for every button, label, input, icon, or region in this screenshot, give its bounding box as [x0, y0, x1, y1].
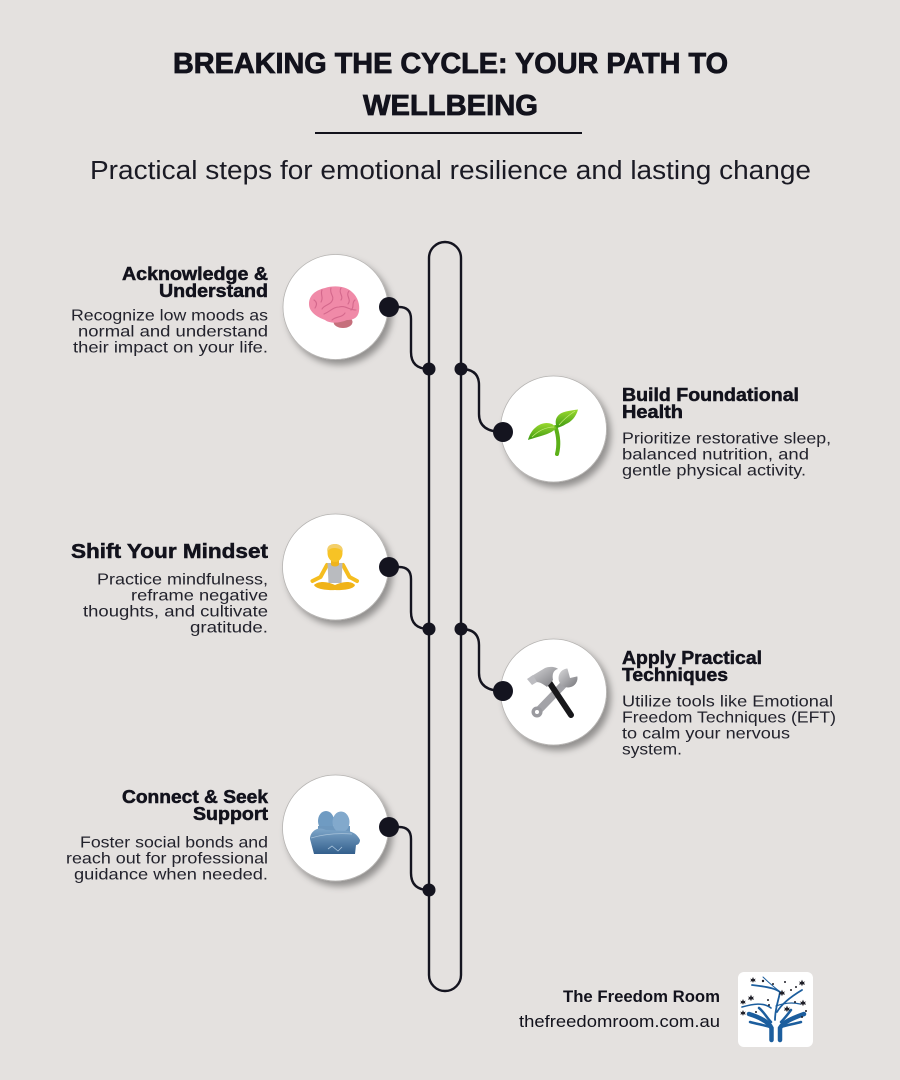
icon: person meditating — [312, 544, 357, 590]
step 4 heading: Apply Practical — [622, 648, 762, 668]
step 1 text — [71, 308, 268, 356]
step 5 text: reach out for professional — [66, 850, 268, 868]
footer brand: The Freedom Room — [563, 988, 720, 1006]
icon: sprout — [528, 410, 578, 454]
big dot — [493, 681, 513, 701]
icon: people hugging — [310, 811, 360, 854]
step 5 circle — [282, 775, 388, 881]
step 3 text: reframe negative — [131, 588, 268, 604]
step 1 heading: Understand — [159, 281, 268, 301]
step 4 text: to calm your nervous — [622, 726, 790, 742]
step 5 heading: Connect & Seek — [122, 787, 269, 807]
step 1: acknowledge and understand — [71, 254, 436, 376]
title: WELLBEING — [363, 90, 538, 122]
step 4 heading — [622, 648, 762, 685]
step 4 text — [622, 694, 836, 758]
step 2 text: balanced nutrition, and — [622, 446, 809, 464]
step 1 heading — [122, 264, 268, 301]
connectors — [389, 307, 503, 890]
step 3 text: Practice mindfulness, — [97, 572, 268, 588]
step 1 text: normal and understand — [78, 324, 268, 340]
step 3 text: thoughts, and cultivate — [83, 604, 268, 620]
junction dot — [422, 622, 436, 636]
step 5 text — [66, 834, 268, 884]
big dot — [379, 557, 399, 577]
junction dot — [454, 622, 468, 636]
step 3 heading: Shift Your Mindset — [71, 541, 268, 563]
step 2 heading: Build Foundational — [622, 385, 799, 405]
footer brand — [519, 988, 720, 1031]
big dot — [379, 297, 399, 317]
step 1 text: their impact on your life. — [73, 340, 268, 356]
title: BREAKING THE CYCLE: YOUR PATH TO — [173, 48, 728, 80]
step 5 text: Foster social bonds and — [80, 834, 268, 852]
title — [173, 48, 728, 122]
junction dot — [454, 362, 468, 376]
step 2 circle — [500, 376, 606, 482]
step 4 text: Utilize tools like Emotional — [622, 694, 833, 710]
icon: brain — [309, 286, 359, 328]
step 2: build foundational health — [454, 362, 831, 482]
step 3: shift your mindset — [71, 514, 436, 636]
icon: hammer and wrench — [527, 666, 579, 718]
junction dot — [422, 884, 436, 896]
subtitle: Practical steps for emotional resilience and lasting change — [90, 157, 811, 185]
step 5: connect and seek support — [66, 775, 436, 896]
step 2 heading — [622, 385, 799, 422]
step 3 text: gratitude. — [190, 620, 268, 636]
step 5 text: guidance when needed. — [74, 866, 268, 884]
big dot — [379, 817, 399, 837]
step 2 text: Prioritize restorative sleep, — [622, 430, 831, 448]
timeline track — [429, 242, 461, 991]
step 2 heading: Health — [622, 402, 683, 422]
step 3 text — [83, 572, 268, 636]
step 4 circle — [500, 639, 606, 745]
step 4: apply practical techniques — [454, 622, 836, 758]
step 5 heading — [122, 787, 269, 824]
step 2 text — [622, 430, 831, 480]
step 1 text: Recognize low moods as — [71, 308, 268, 324]
step 4 text: Freedom Techniques (EFT) — [622, 710, 836, 726]
step 4 heading: Techniques — [622, 665, 728, 685]
step 3 circle — [282, 514, 388, 620]
step 4 text: system. — [622, 742, 682, 758]
step 2 text: gentle physical activity. — [622, 462, 806, 480]
logo: tree and hands — [738, 972, 813, 1047]
junction dot — [422, 362, 436, 376]
step 5 heading: Support — [193, 804, 268, 824]
step 1 heading: Acknowledge & — [122, 264, 268, 284]
big dot — [493, 422, 513, 442]
footer brand: thefreedomroom.com.au — [519, 1013, 720, 1031]
step 1 circle — [283, 254, 388, 360]
